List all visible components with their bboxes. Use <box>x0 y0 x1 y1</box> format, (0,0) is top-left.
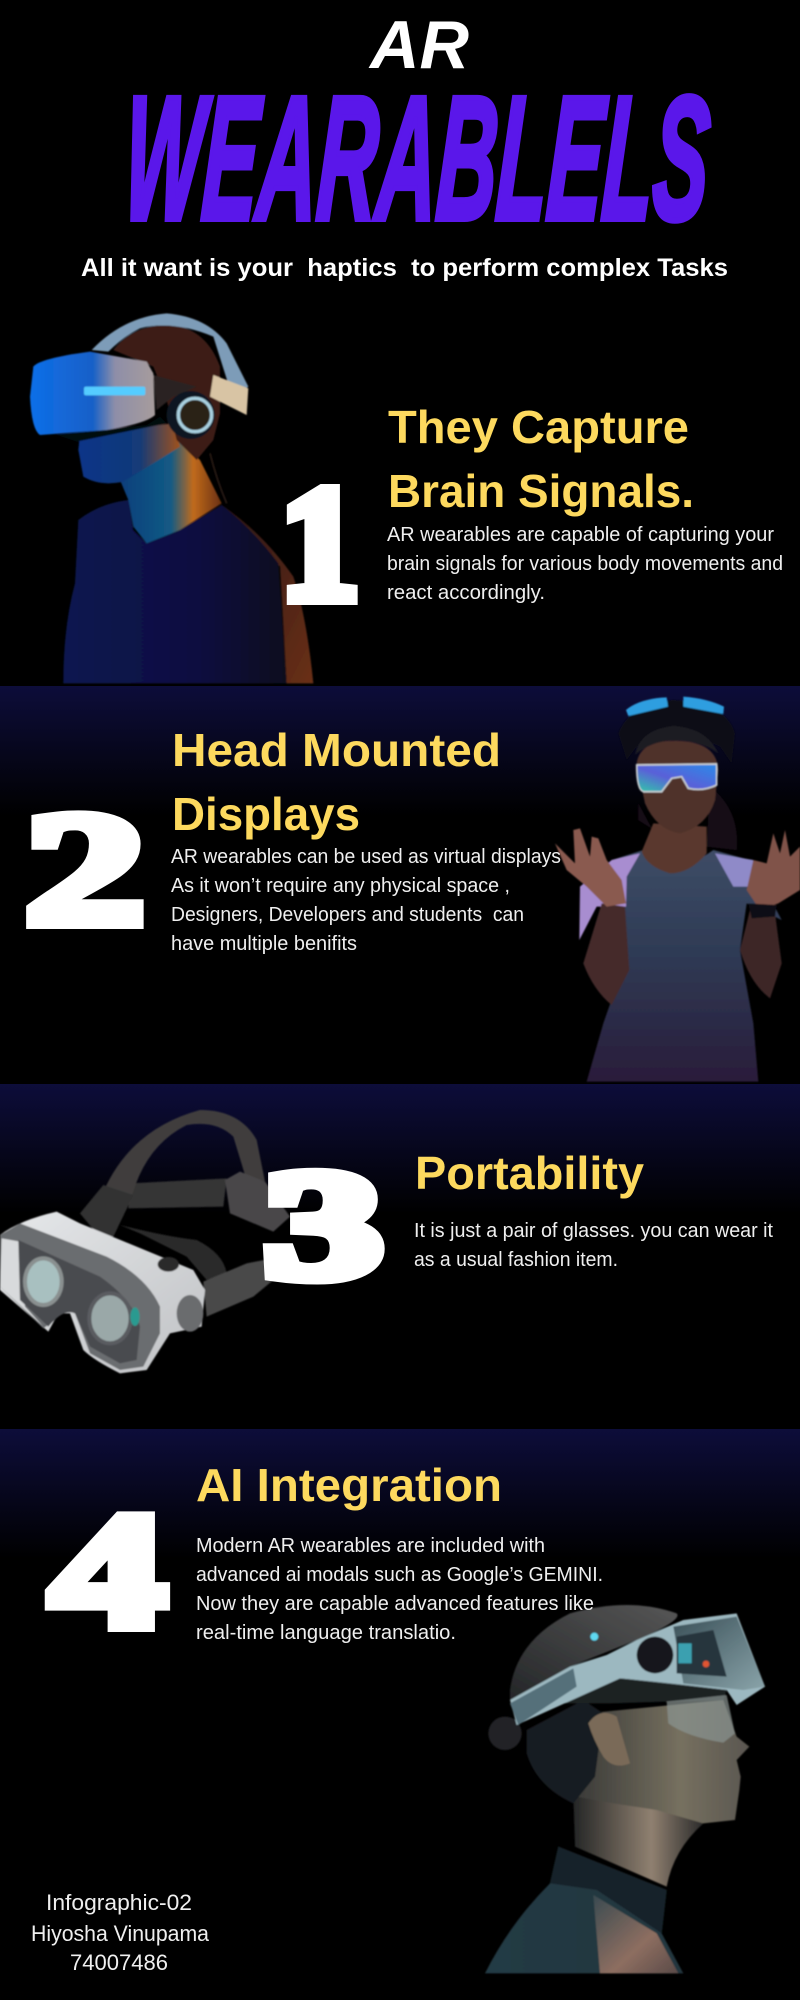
visor light bar <box>84 387 145 395</box>
side mount <box>210 375 248 415</box>
body text 2: have multiple benifits <box>171 933 357 955</box>
hair <box>113 325 220 460</box>
visor <box>30 352 155 435</box>
heading 1: Brain Signals. <box>388 465 694 517</box>
heading 1: They Capture <box>388 401 689 453</box>
shirt <box>587 850 782 1082</box>
wire <box>210 453 227 503</box>
image: woman profile with AI headset <box>485 1605 765 1973</box>
shade below band <box>537 1678 727 1703</box>
right hand <box>747 830 800 910</box>
footer credits: Infographic-02 <box>46 1890 192 1915</box>
band: section 3 background <box>0 1084 800 1214</box>
digit 4: 4 <box>50 1479 166 1662</box>
body text 4 <box>196 1535 603 1644</box>
headphone ring <box>178 398 212 432</box>
body text 2: AR wearables can be used as virtual displays <box>171 846 561 868</box>
body text 1 <box>387 524 783 604</box>
digit 3: 3 <box>265 1141 382 1310</box>
glass front <box>673 1617 765 1690</box>
heading 2: Head Mounted <box>172 724 501 776</box>
side strap <box>203 1258 273 1317</box>
foam padding <box>120 1225 227 1280</box>
left arm <box>583 903 629 1005</box>
body text 3: It is just a pair of glasses. you can wear it <box>414 1220 773 1242</box>
dark frame <box>0 1223 160 1370</box>
body text 4: advanced ai modals such as Google’s GEMINI. <box>196 1564 603 1586</box>
red dot <box>703 1661 709 1667</box>
footer credits <box>31 1890 210 1975</box>
shadow under visor <box>57 417 167 442</box>
footer credits: 74007486 <box>70 1950 168 1975</box>
image: person with blue VR headset <box>30 313 313 683</box>
heading 4: AI Integration <box>196 1459 502 1511</box>
top button <box>158 1257 179 1272</box>
hair <box>638 787 737 850</box>
collar <box>550 1847 667 1933</box>
left white panel <box>0 1238 43 1327</box>
left lens <box>25 1258 62 1305</box>
heading 2 <box>172 724 501 840</box>
shirt <box>63 500 287 683</box>
teal glow <box>130 1307 140 1326</box>
glasses <box>637 764 717 792</box>
bun <box>488 1717 522 1750</box>
clear lens <box>667 1695 735 1743</box>
side button <box>177 1295 203 1332</box>
cyan dot <box>590 1633 598 1641</box>
right sleeve <box>715 853 753 887</box>
band <box>510 1613 765 1725</box>
headphone <box>167 391 215 439</box>
neck <box>642 823 707 873</box>
digit 2: 2 <box>25 780 145 958</box>
back hair <box>527 1700 603 1803</box>
neck <box>120 440 222 543</box>
left sleeve <box>579 853 640 940</box>
wristband <box>748 903 777 918</box>
inner dark <box>18 1240 140 1363</box>
image: woman with hands raised <box>555 697 800 1082</box>
top strap <box>100 1110 265 1217</box>
body text 2: Designers, Developers and students can <box>171 904 524 926</box>
title: AR: AR <box>368 7 469 83</box>
image: VR headset <box>0 1110 290 1373</box>
head strap <box>92 313 248 400</box>
face <box>637 741 718 833</box>
white shell <box>0 1212 205 1373</box>
face <box>78 423 180 483</box>
band: section 4 background <box>0 1429 800 1559</box>
headband <box>635 726 718 755</box>
right arm <box>740 910 782 998</box>
headset <box>618 700 735 763</box>
rear pad <box>225 1172 290 1232</box>
strap <box>153 375 197 410</box>
body text 4: Modern AR wearables are included with <box>196 1535 545 1557</box>
display patch <box>677 1630 727 1677</box>
strap clip <box>80 1185 133 1237</box>
top hair <box>510 1605 677 1700</box>
body text 4: real-time language translatio. <box>196 1622 456 1644</box>
body text 4: Now they are capable advanced features like <box>196 1593 594 1615</box>
heading 2: Displays <box>172 788 360 840</box>
body text 2: As it won’t require any physical space , <box>171 875 510 897</box>
display glow <box>678 1643 692 1663</box>
body text 3 <box>414 1220 773 1271</box>
headset blue top <box>626 697 724 716</box>
jacket highlight <box>593 1895 678 1973</box>
neck <box>573 1797 703 1887</box>
rear strap <box>128 1178 227 1208</box>
body text 1: brain signals for various body movements and <box>387 553 783 575</box>
footer credits: Hiyosha Vinupama <box>31 1921 210 1946</box>
ear <box>588 1713 630 1766</box>
band dark section <box>510 1668 577 1725</box>
heading 3: Portability <box>415 1147 644 1199</box>
right lens <box>89 1293 131 1343</box>
body text 1: AR wearables are capable of capturing your <box>387 524 774 546</box>
left hand <box>555 828 626 907</box>
back rim <box>222 505 313 683</box>
face <box>577 1700 749 1823</box>
band: section 2 background <box>0 686 800 816</box>
heading 1 <box>388 401 694 517</box>
jacket <box>485 1847 683 1973</box>
body text 1: react accordingly. <box>387 582 545 604</box>
subtitle: All it want is your haptics to perform complex Tasks <box>81 254 728 282</box>
body text 3: as a usual fashion item. <box>414 1249 618 1271</box>
digit 1: 1 <box>281 455 359 634</box>
body text 2 <box>171 846 561 955</box>
camera <box>637 1637 673 1673</box>
